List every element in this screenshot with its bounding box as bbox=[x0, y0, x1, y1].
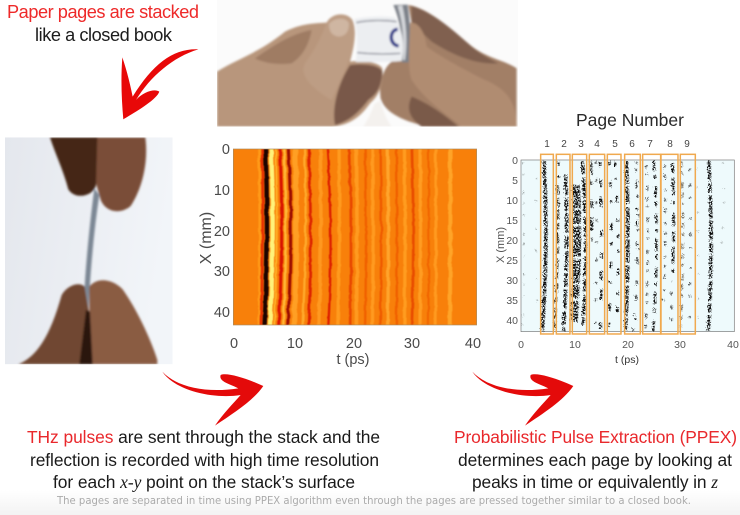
scatter y axis labels: 30 bbox=[506, 275, 518, 287]
heat map plot area bbox=[233, 142, 477, 332]
right hand bbox=[380, 5, 517, 127]
heading: paper pages are stacked: like a closed book bbox=[35, 25, 173, 45]
left palm shading bbox=[255, 30, 312, 64]
heat map y axis labels: 10 bbox=[214, 183, 230, 199]
scatter plot area bbox=[521, 160, 734, 332]
page numbers: 6 bbox=[629, 139, 635, 150]
scatter x axis labels: 0 bbox=[518, 339, 524, 351]
scatter y axis labels: 20 bbox=[506, 235, 518, 247]
left hand fingers in shadow bbox=[334, 64, 382, 125]
paper front page bbox=[354, 16, 403, 62]
gap between hands bbox=[365, 102, 390, 126]
photo: side view of pressed paper stack bbox=[5, 137, 173, 364]
scatter y axis labels: 35 bbox=[506, 295, 518, 307]
top-right finger bbox=[90, 137, 146, 211]
left thumb bbox=[330, 14, 353, 52]
page numbers: 2 bbox=[561, 139, 567, 150]
dense peak traces bbox=[543, 161, 711, 331]
title: page number: Page Number bbox=[576, 110, 684, 130]
text block: PPEX: determines each page by looking at bbox=[458, 450, 732, 470]
text block: THz pulses: THz pulses are sent through the stack and the bbox=[27, 427, 380, 447]
heading: paper pages are stacked: Paper pages are stacked bbox=[7, 2, 199, 22]
heat map chart: reflected signal vs time and position bbox=[198, 142, 481, 368]
heat map y axis labels: X (mm) bbox=[198, 212, 215, 264]
arrow: from side-view photo to heat map bbox=[162, 372, 263, 426]
text block: THz pulses bbox=[27, 427, 380, 492]
scatter y axis labels: 10 bbox=[506, 195, 518, 207]
caption: The pages are separated in time using PPEX algorithm even through the pages are pressed together similar to a closed book. bbox=[56, 495, 691, 507]
page numbers: 7 bbox=[647, 139, 653, 150]
scatter x axis labels: t (ps) bbox=[615, 354, 639, 366]
heading: paper pages are stacked bbox=[7, 2, 199, 45]
arrow: from heading down to side-view photo bbox=[121, 49, 198, 119]
scatter y axis labels: 5 bbox=[512, 175, 518, 187]
heat map y axis labels: 30 bbox=[214, 264, 230, 280]
arrow: from heat map to scatter chart bbox=[472, 372, 573, 426]
photo: hands flexing the closed paper stack bbox=[217, 0, 518, 127]
paper edge bbox=[85, 188, 99, 308]
heat map x axis labels: 30 bbox=[404, 336, 420, 352]
scatter y axis labels: 40 bbox=[506, 315, 518, 327]
scatter x axis labels bbox=[518, 339, 739, 366]
scatter y axis labels: 0 bbox=[512, 155, 518, 167]
page numbers: 1 bbox=[544, 139, 550, 150]
scatter x axis labels: 20 bbox=[622, 339, 634, 351]
page numbers: 8 bbox=[667, 139, 673, 150]
page numbers: 5 bbox=[612, 139, 618, 150]
scatter x axis labels: 40 bbox=[727, 339, 739, 351]
text block: THz pulses: reflection is recorded with high time resolution bbox=[30, 450, 379, 470]
left hand bbox=[217, 15, 382, 127]
top-left finger bbox=[50, 137, 97, 196]
text block: PPEX bbox=[454, 427, 737, 492]
page numbers: 3 bbox=[578, 139, 584, 150]
right thumb bbox=[409, 23, 517, 127]
page boxes 1 to 9 bbox=[541, 154, 695, 334]
heat map x axis labels: t (ps) bbox=[336, 352, 370, 368]
right upper knuckles bbox=[412, 6, 498, 64]
scatter y axis labels bbox=[495, 155, 518, 327]
scatter y axis labels: X (mm) bbox=[495, 227, 507, 263]
bottom-right finger bbox=[89, 280, 157, 364]
scatter y axis labels: 25 bbox=[506, 255, 518, 267]
scatter x axis labels: 10 bbox=[569, 339, 581, 351]
page numbers: 9 bbox=[684, 139, 690, 150]
page numbers: 4 bbox=[594, 139, 600, 150]
background noise points bbox=[523, 162, 724, 331]
heat map x axis labels bbox=[230, 336, 481, 368]
scatter x axis labels: 30 bbox=[674, 339, 686, 351]
heat map x axis labels: 10 bbox=[287, 336, 303, 352]
text block: PPEX: Probabilistic Pulse Extraction (PPEX) bbox=[454, 427, 737, 447]
page stack bbox=[393, 5, 411, 62]
scatter y axis labels: 15 bbox=[506, 215, 518, 227]
heat map y axis labels: 20 bbox=[214, 224, 230, 240]
heat map x axis labels: 40 bbox=[465, 336, 481, 352]
heat map x axis labels: 0 bbox=[230, 336, 238, 352]
heat map y axis labels: 0 bbox=[222, 142, 230, 158]
heat map y axis labels: 40 bbox=[214, 305, 230, 321]
page numbers bbox=[544, 139, 690, 150]
heat map x axis labels: 20 bbox=[346, 336, 362, 352]
text block: PPEX: peaks in time or equivalently in z bbox=[472, 472, 718, 492]
heat map y axis labels bbox=[198, 142, 230, 321]
scatter chart: extracted pulse peaks with page boxes bbox=[495, 139, 739, 366]
sparse peak traces bbox=[595, 162, 691, 331]
bottom-left finger bbox=[18, 284, 91, 364]
text block: THz pulses: for each x-y point on the stack’s surface bbox=[53, 472, 355, 492]
right lower shadow bbox=[409, 97, 458, 127]
